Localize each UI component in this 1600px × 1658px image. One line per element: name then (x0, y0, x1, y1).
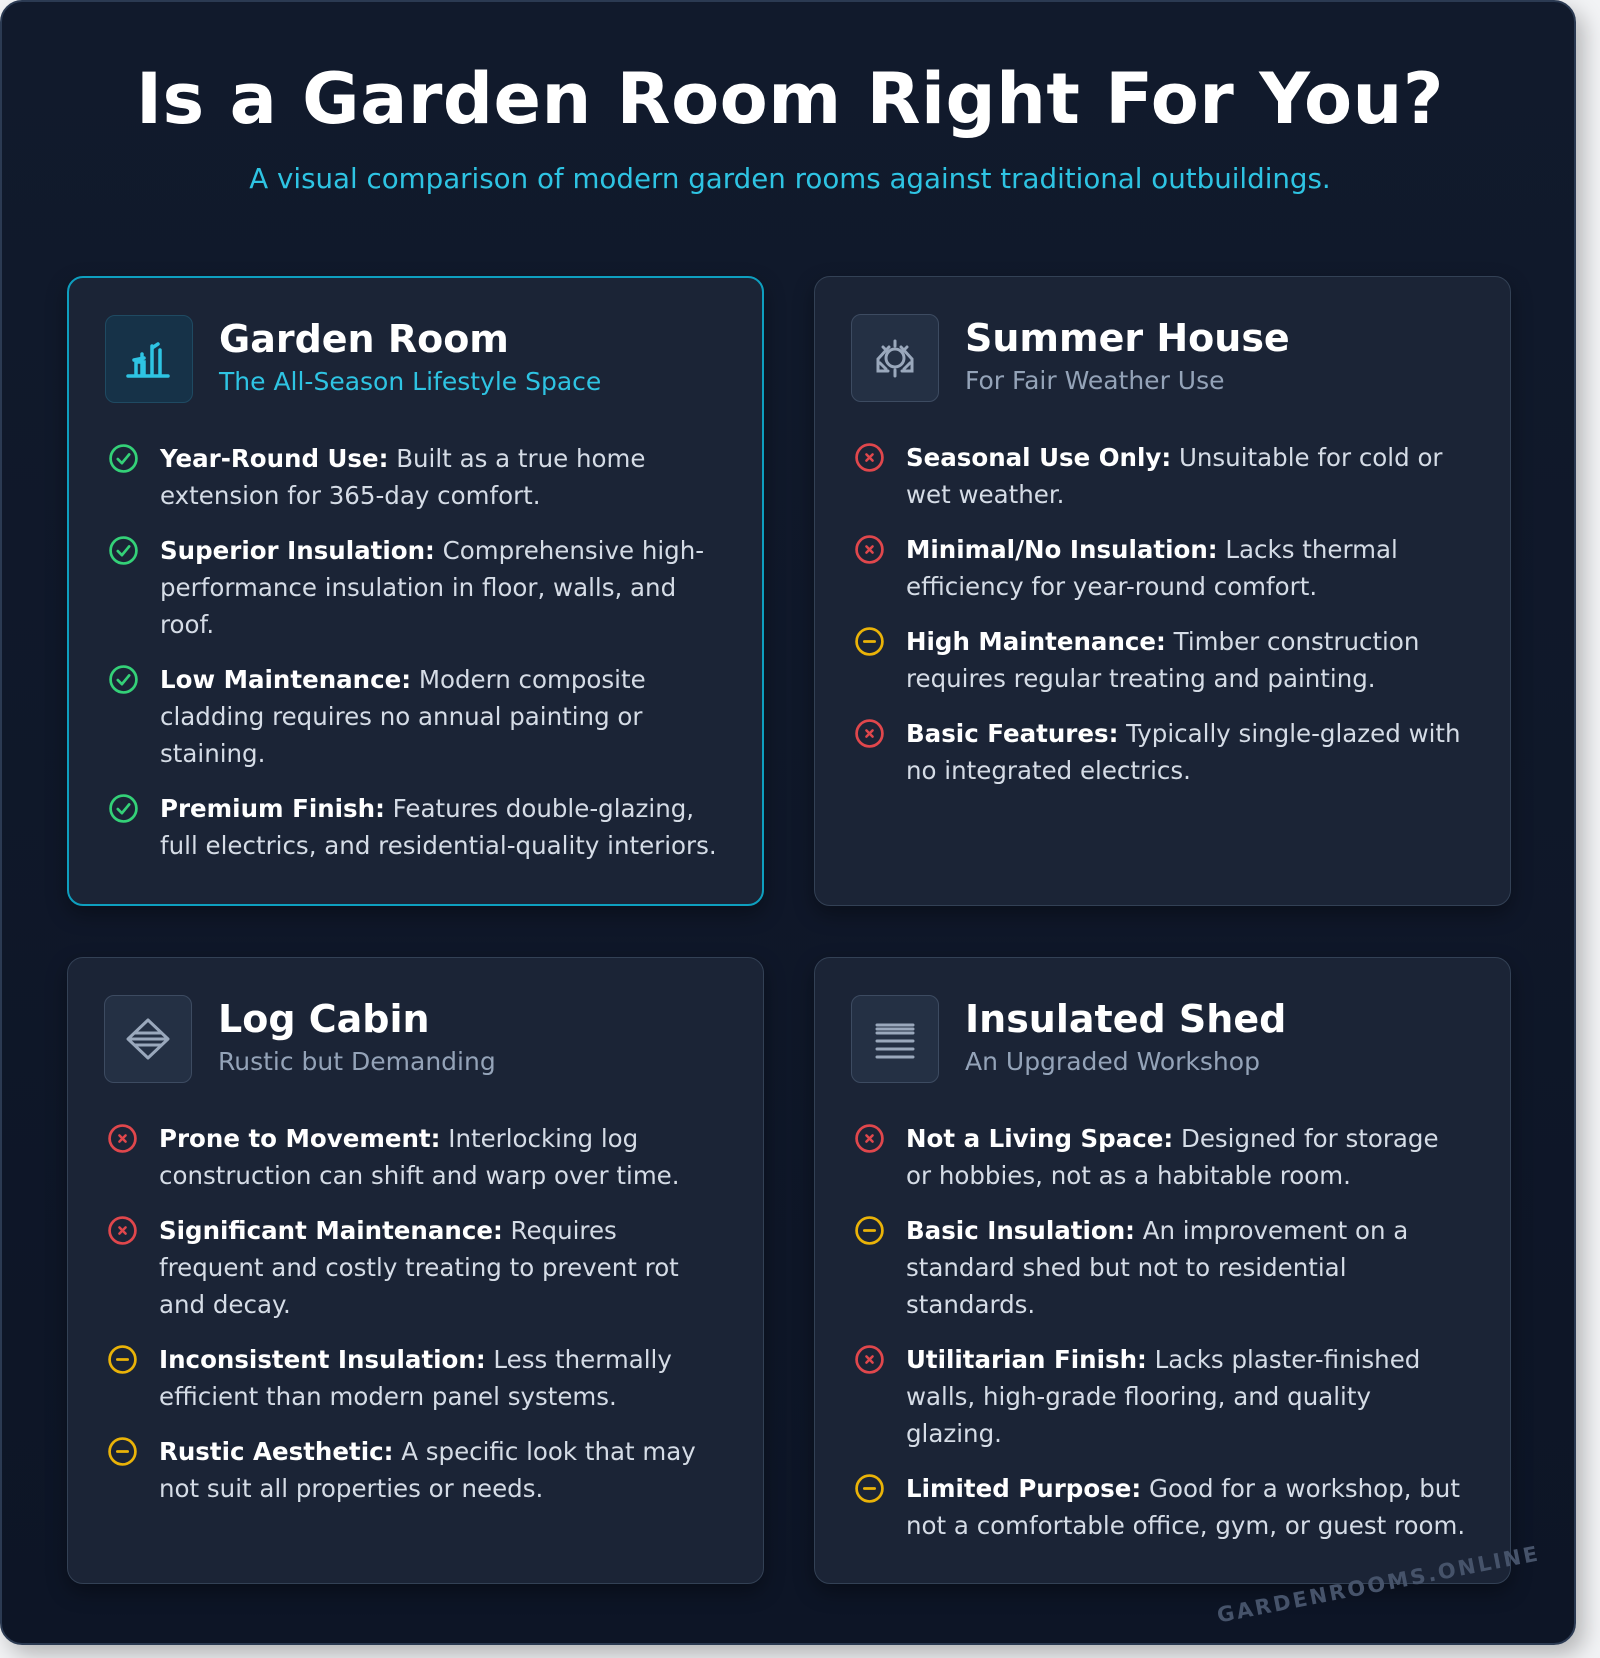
list: Prone to Movement: Interlocking log construction can shift and warp over time. (159, 1124, 680, 1190)
list: Utilitarian Finish: Lacks plaster-finished walls, high-grade flooring, and quality (906, 1345, 1420, 1411)
subheading: Rustic but Demanding (218, 1047, 496, 1076)
panel: garden room (67, 276, 764, 906)
list: Rustic Aesthetic: A specific look that may not suit all properties or needs. (159, 1437, 696, 1503)
watermark: GARDENROOMS.ONLINE (1215, 1541, 1542, 1628)
heading: Log Cabin (218, 997, 430, 1041)
icon: summer house (851, 314, 939, 402)
panel: summer house (814, 276, 1511, 906)
list: Significant Maintenance: Requires (159, 1216, 617, 1245)
list: Inconsistent Insulation: Less thermally efficient than modern panel systems. (159, 1345, 672, 1411)
list: Superior Insulation: Comprehensive high-performance insulation in floor, walls, and roof. (160, 536, 704, 639)
list: Basic Insulation: An improvement on a standard shed but not to residential standards. (906, 1216, 1408, 1319)
list: Low Maintenance: Modern composite cladding requires no annual painting or staining. (160, 665, 646, 768)
subtitle: A visual comparison of modern garden rooms against traditional outbuildings. (249, 162, 1331, 195)
list: Year-Round Use: Built as a true home extension for 365-day comfort. (160, 444, 645, 510)
list: Seasonal Use Only: Unsuitable for cold or wet weather. (906, 443, 1443, 509)
icon: insulated shed (851, 995, 939, 1083)
heading: Garden Room (219, 317, 509, 361)
list: glazing. (906, 1419, 1002, 1448)
list: Premium Finish: Features double-glazing, full electrics, and residential-quality interiors. (160, 794, 717, 860)
heading: Insulated Shed (965, 997, 1286, 1041)
panel: insulated shed (814, 957, 1511, 1584)
list: Basic Features: Typically single-glazed with no integrated electrics. (906, 719, 1461, 785)
subheading: An Upgraded Workshop (965, 1047, 1260, 1076)
list: or hobbies, not as a habitable room. (906, 1161, 1351, 1190)
list: Not a Living Space: Designed for storage (906, 1124, 1439, 1153)
list (109, 444, 717, 860)
list: High Maintenance: Timber construction requires regular treating and painting. (906, 627, 1419, 693)
title: Is a Garden Room Right For You? (136, 58, 1444, 140)
list (855, 443, 1461, 785)
icon: log cabin (104, 995, 192, 1083)
list: Limited Purpose: Good for a workshop, but not a comfortable office, gym, or guest room. (906, 1474, 1465, 1540)
list (108, 1124, 696, 1503)
subheading: For Fair Weather Use (965, 366, 1224, 395)
panel: log cabin (67, 957, 764, 1584)
list: frequent and costly treating to prevent rot and decay. (159, 1253, 679, 1319)
icon: garden room (105, 315, 193, 403)
subheading: The All-Season Lifestyle Space (219, 367, 601, 396)
list (855, 1124, 1465, 1540)
list: Minimal/No Insulation: Lacks thermal efficiency for year-round comfort. (906, 535, 1398, 601)
heading: Summer House (965, 316, 1290, 360)
